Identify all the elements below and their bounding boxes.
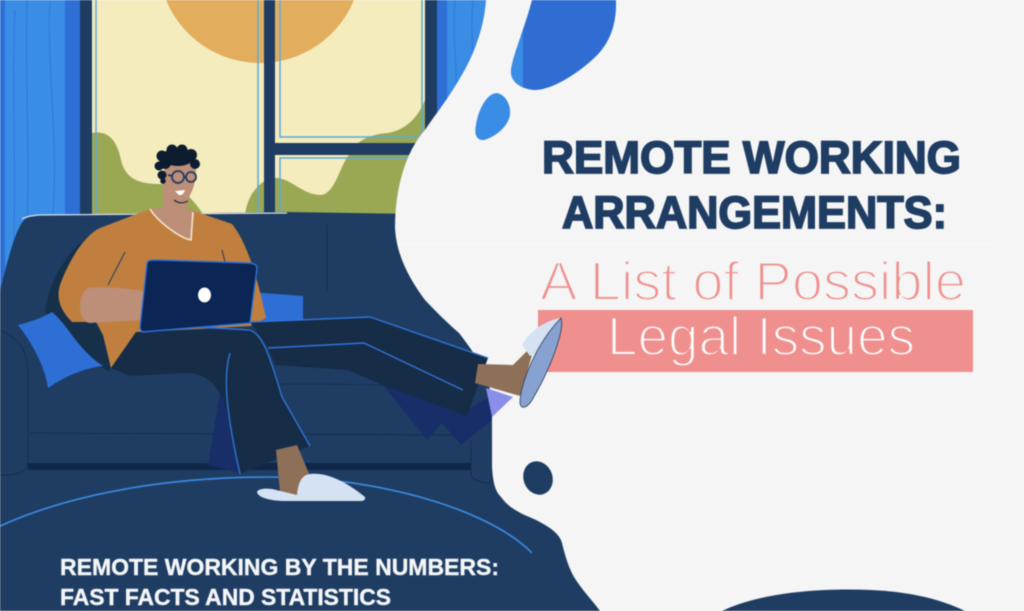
torso sweater — [58, 209, 266, 368]
title: REMOTE WORKING — [542, 132, 961, 183]
large blue droplet — [511, 0, 616, 90]
person on sofa — [18, 144, 562, 501]
section heading: FAST FACTS AND STATISTICS — [60, 584, 391, 610]
legal issues banner: Legal Issues — [607, 305, 915, 367]
laptop — [140, 260, 257, 332]
rug outline — [0, 477, 532, 553]
small blue droplet — [475, 93, 510, 140]
right pillow — [250, 292, 303, 325]
forearm — [80, 287, 145, 323]
section heading: REMOTE WORKING BY THE NUMBERS: — [60, 554, 499, 580]
window glazing lines — [96, 0, 422, 214]
title — [542, 132, 961, 238]
subtitle line: A List of Possible — [540, 250, 966, 312]
standing foot — [276, 445, 310, 496]
raised foot — [475, 350, 532, 396]
glasses — [168, 171, 196, 183]
left pillow — [18, 312, 103, 388]
window frame — [80, 0, 437, 214]
smile — [175, 190, 185, 195]
legal issues banner — [538, 305, 973, 372]
standing leg — [111, 328, 310, 474]
floor slipper shadow — [486, 388, 513, 417]
blob divider line — [397, 243, 995, 244]
illustration backdrop: room scene — [0, 0, 600, 611]
standing slipper — [257, 474, 365, 501]
raised slipper — [520, 318, 562, 407]
hair — [154, 144, 200, 184]
neck and face — [150, 160, 196, 240]
window pane — [92, 0, 425, 214]
couch shadows — [348, 370, 492, 445]
sofa shadow behind person — [45, 228, 110, 372]
right curtain — [437, 0, 497, 200]
extended leg — [250, 317, 488, 416]
navy droplet — [519, 457, 557, 499]
bottom right navy wave — [722, 590, 965, 611]
left curtain — [0, 0, 80, 300]
white paper blob — [395, 0, 1024, 611]
section heading — [60, 554, 499, 610]
sofa — [0, 212, 500, 483]
sun — [158, 0, 362, 63]
title: ARRANGEMENTS: — [562, 187, 947, 238]
left hill — [92, 132, 203, 214]
right hill — [245, 100, 425, 214]
